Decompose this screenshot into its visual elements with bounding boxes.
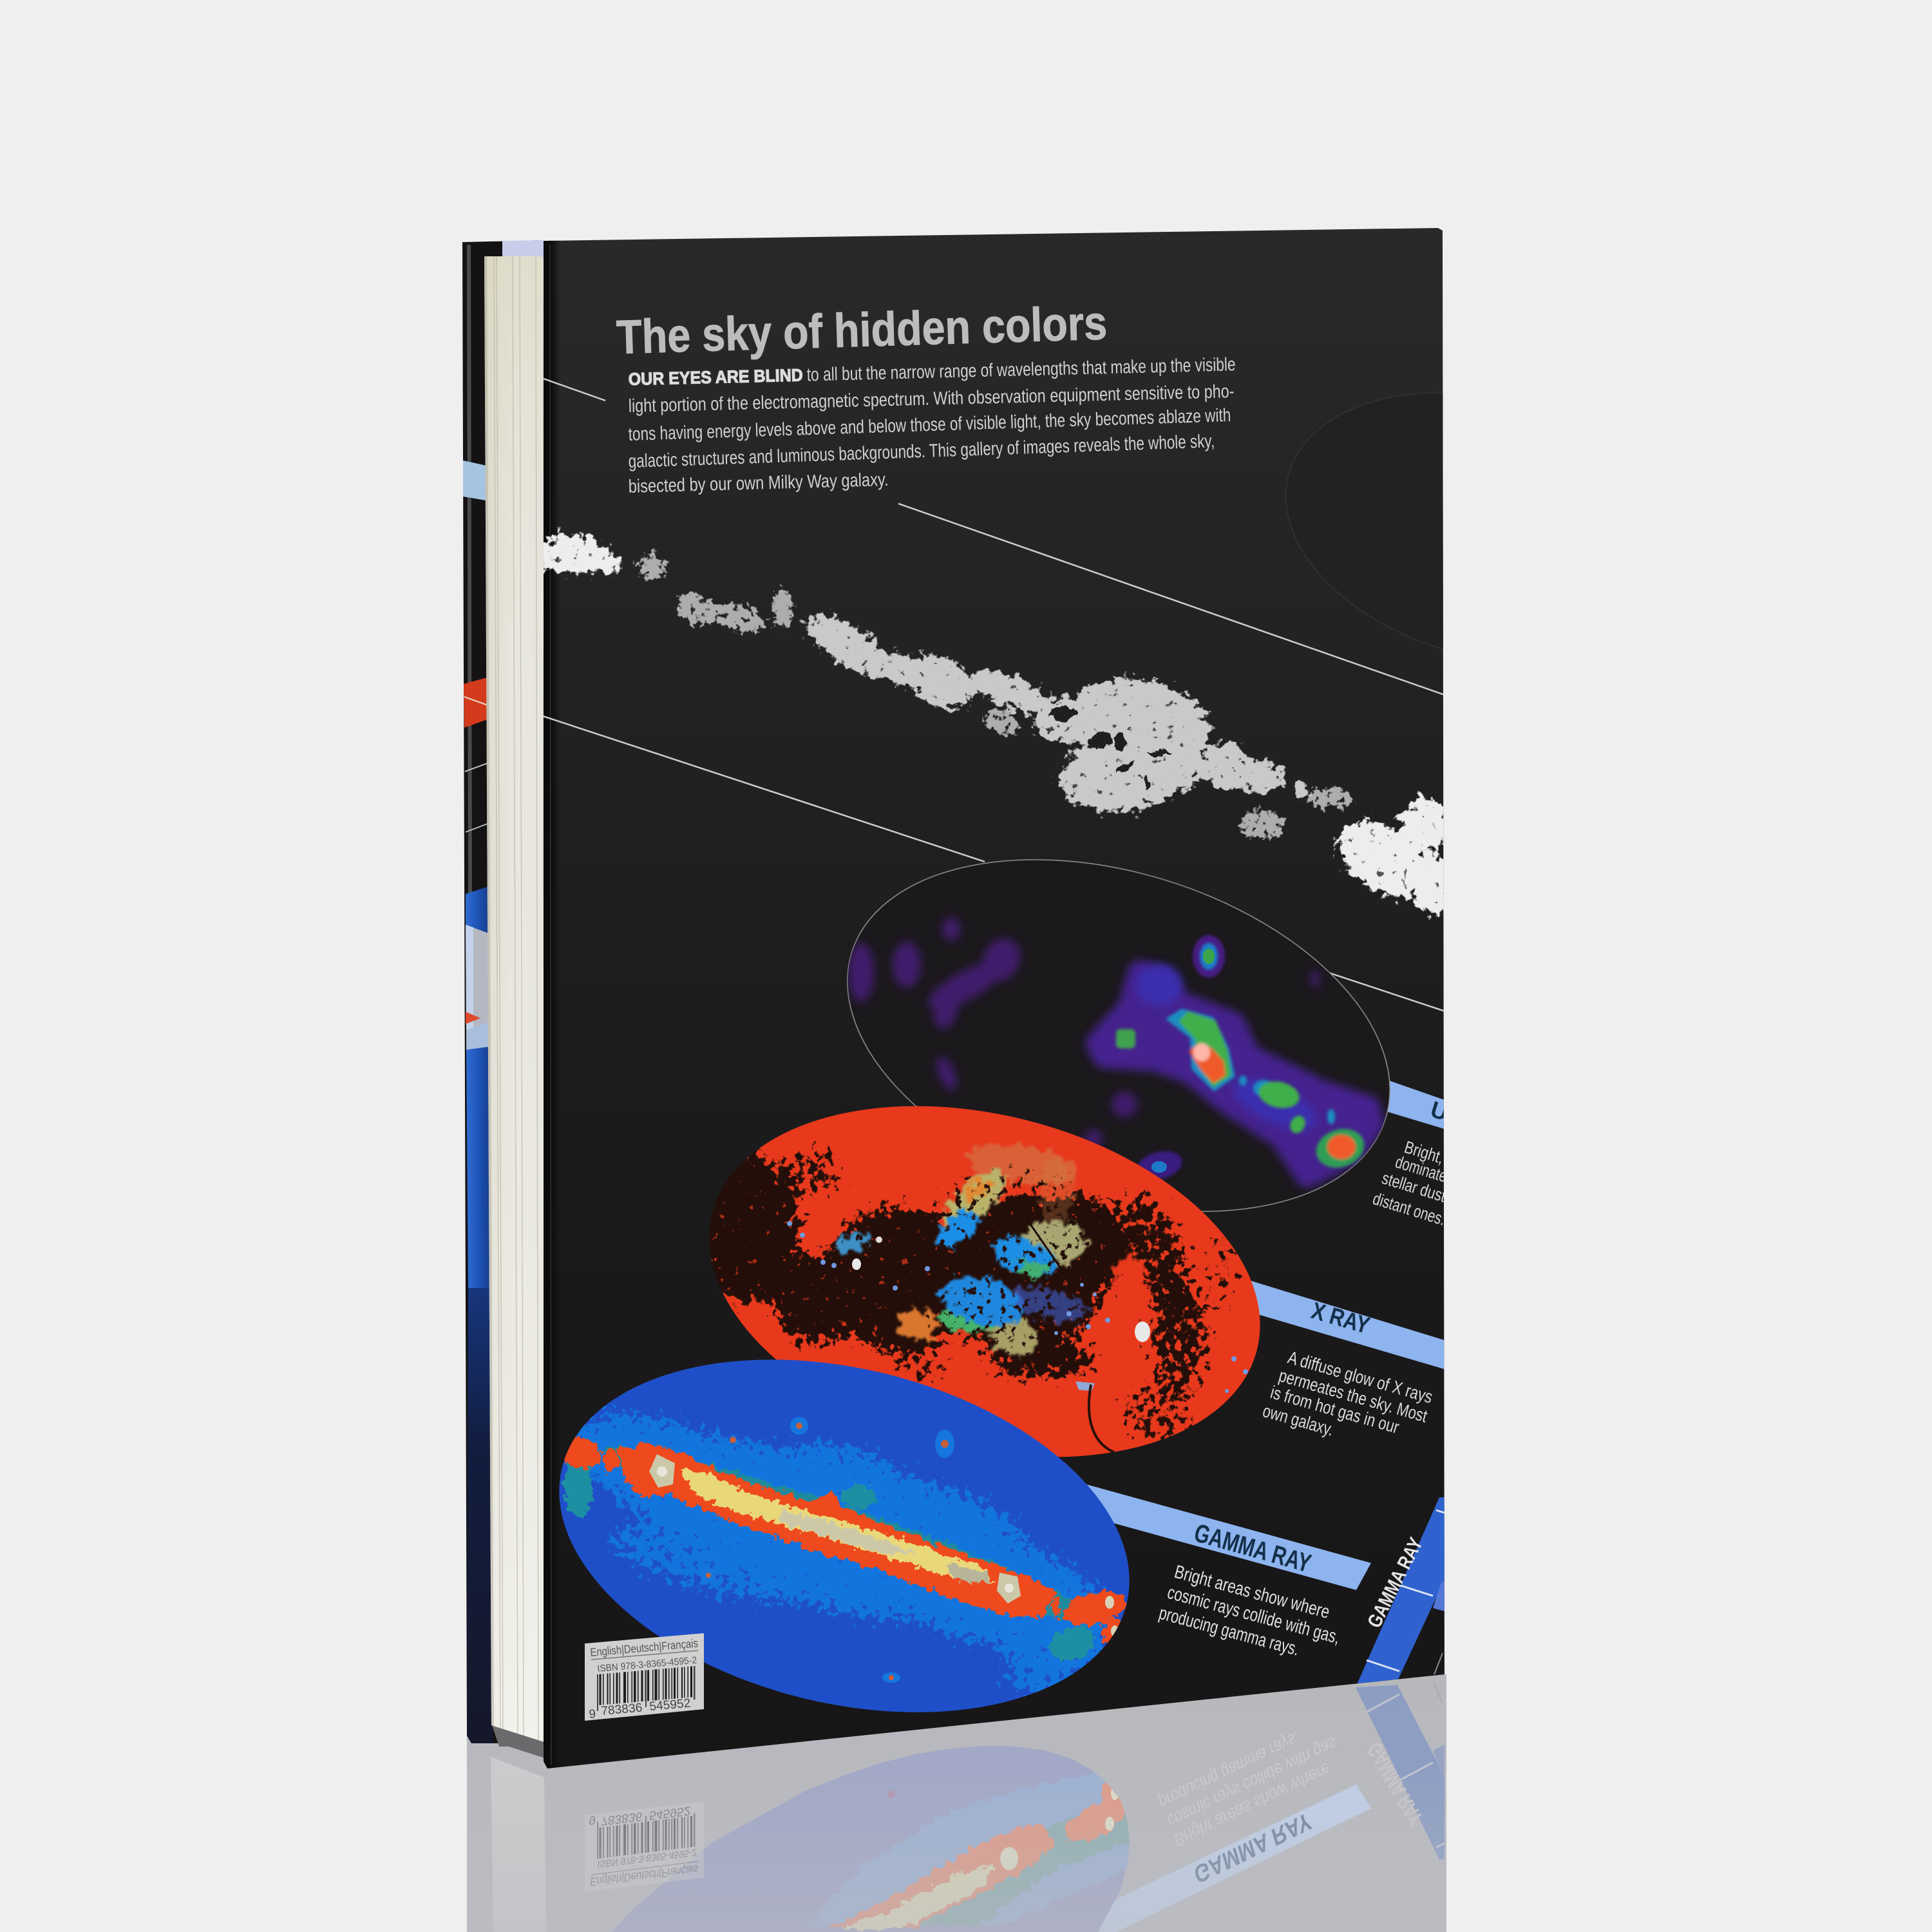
shadow under the page block: [491, 1723, 545, 1758]
bars: [597, 1666, 696, 1711]
green cores and hot spots: [1116, 1009, 1369, 1173]
intro paragraph: tons having energy levels above and below those of visible light, the sky becomes ablaze with: [628, 405, 1231, 445]
UV caption: distant ones.: [1370, 1189, 1448, 1229]
dark lanes in the galactic core: [1047, 706, 1172, 790]
ISBN barcode label: [585, 1633, 704, 1721]
X ray all-sky map: [672, 1052, 1298, 1511]
reflective floor with book reflection: [467, 1669, 1446, 1932]
lavender strip at board top: [502, 240, 544, 258]
reflected gamma ray label band: [1092, 1785, 1371, 1932]
X ray caption: permeates the sky. Most: [1276, 1365, 1430, 1426]
blue label band: UV: [1378, 1077, 1466, 1130]
barcode digits: [589, 1696, 691, 1721]
back board of the book seen behind the pages: [462, 240, 544, 1743]
hinge groove: [544, 238, 560, 1771]
page block: [484, 256, 544, 1742]
thin diagonal rules: [543, 379, 1444, 1011]
coloured central emission: [833, 1137, 1145, 1368]
UV caption: [1370, 1137, 1449, 1229]
ruler label: GAMMA RAY: [1363, 1534, 1427, 1631]
bright nodes: [649, 1454, 1119, 1637]
faint ellipse top right: [1285, 392, 1443, 650]
X ray caption: own galaxy.: [1260, 1401, 1336, 1440]
gamma ray all-sky map: [523, 1305, 1166, 1766]
gamma ray heading and caption: Bright areas show where: [1172, 1562, 1332, 1623]
intro paragraph: to all but the narrow range of wavelengths that make up the visible: [806, 354, 1236, 385]
intro paragraph: [628, 354, 1236, 497]
reflected gamma ray map: [605, 1739, 1133, 1932]
title: The sky of hidden colors: [616, 296, 1108, 364]
blue label band: X RAY: X RAY: [1309, 1297, 1373, 1339]
barcode digits: 9: [589, 1707, 596, 1721]
blue label band: UV: UV: [1428, 1095, 1466, 1130]
X ray caption: A diffuse glow of X rays: [1285, 1347, 1435, 1407]
barcode digits: 545952: [649, 1696, 691, 1714]
X ray caption: is from hot gas in our: [1268, 1382, 1401, 1437]
gamma ray heading and caption: cosmic rays collide with gas,: [1165, 1582, 1342, 1648]
reflected page block: [491, 1757, 546, 1932]
blue label band: X RAY: [1243, 1278, 1444, 1369]
book product photo: [462, 228, 1446, 1932]
gamma ray heading and caption: [1157, 1519, 1342, 1660]
milky way visible-light band: [531, 533, 1462, 916]
intro paragraph: galactic structures and luminous backgrounds. This gallery of images reveals the whole sky,: [628, 431, 1215, 472]
language line: English|Deutsch|Français: [590, 1636, 699, 1659]
barcode digits: 783836: [601, 1701, 643, 1718]
intro paragraph: OUR EYES ARE BLIND: [628, 365, 803, 389]
dark absorption regions: [694, 1146, 1238, 1444]
UV caption: stellar dust: [1379, 1168, 1448, 1206]
dither over central emission: [824, 1166, 1121, 1359]
gamma ray heading and caption: GAMMA RAY: [1191, 1519, 1314, 1578]
intro paragraph: bisected by our own Milky Way galaxy.: [628, 469, 889, 497]
blue label band and caption: GAMMA RAY: [1082, 1483, 1371, 1660]
gamma ray heading and caption: producing gamma rays.: [1157, 1603, 1302, 1660]
back cover: [544, 228, 1444, 1768]
dim purple blobs: [848, 918, 1320, 1149]
teal and red galactic plane: [554, 1425, 1131, 1666]
UV all-sky map: [804, 797, 1434, 1274]
board colour bands: [463, 460, 493, 1743]
bright blue clumps: [552, 1382, 1137, 1716]
X ray caption: [1260, 1347, 1435, 1440]
point sources: [787, 1221, 1248, 1393]
small gamma sources: [701, 1417, 954, 1683]
intro paragraph: light portion of the electromagnetic spectrum. With observation equipment sensitive to pho-: [628, 381, 1235, 417]
vertical gamma ray ruler: [1356, 1497, 1444, 1687]
reflected labels: [585, 1669, 1444, 1902]
ISBN number: ISBN 978-3-8365-4595-2: [597, 1655, 697, 1674]
UV caption: dominate: [1393, 1152, 1449, 1186]
ruler small block: [1433, 1581, 1444, 1611]
UV caption: Bright,: [1402, 1137, 1446, 1168]
main purple band: [1098, 972, 1372, 1175]
